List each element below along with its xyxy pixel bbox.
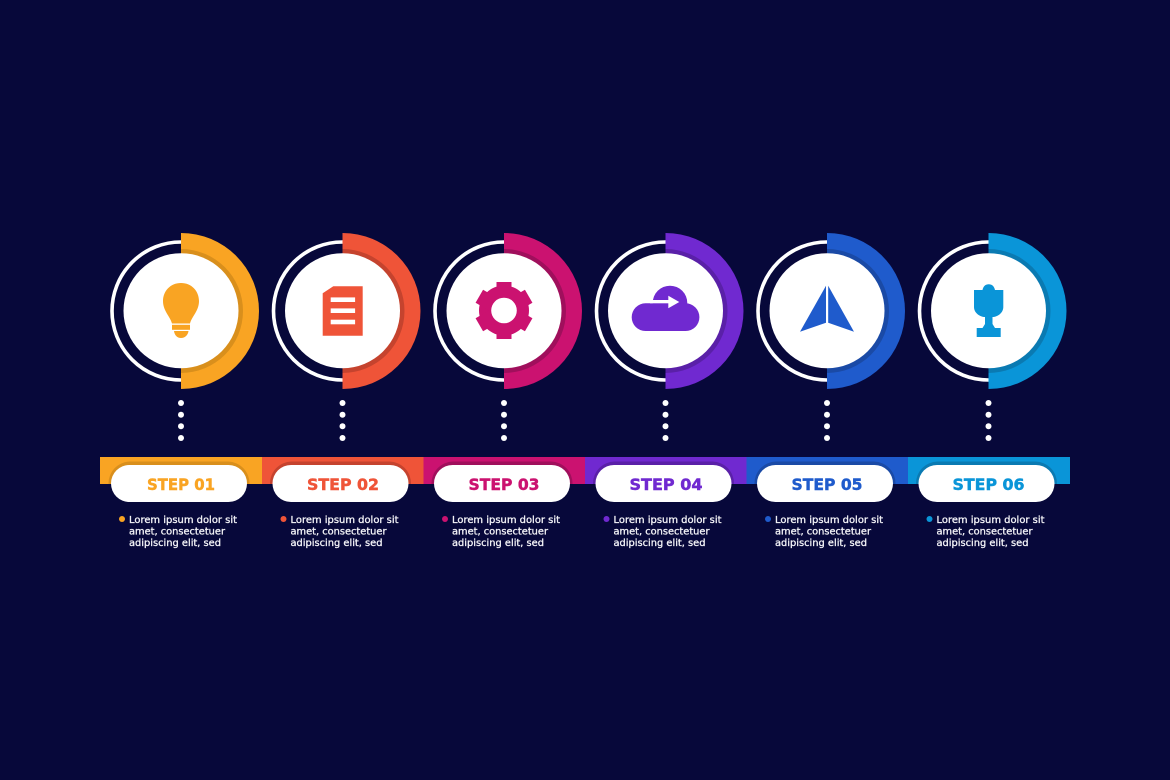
step label 06 (916, 462, 1057, 502)
description 04: Lorem ipsum dolor sit (614, 515, 722, 526)
timeline segment 02 (262, 457, 424, 484)
description 03 (442, 515, 560, 549)
step label 01 (108, 462, 250, 502)
description 01: Lorem ipsum dolor sit (129, 515, 237, 526)
connector dots 04 (662, 400, 668, 441)
icon: cloud with arrow (632, 286, 699, 331)
step label 03 (431, 462, 573, 502)
connector dots 05 (824, 400, 830, 441)
timeline segment 05 (746, 457, 908, 484)
step label 05: STEP 05 (792, 475, 862, 494)
description 05: adipiscing elit, sed (775, 538, 867, 549)
panel: step 05 (746, 233, 908, 549)
connector dots 06 (986, 400, 992, 441)
half ring accent 03 (435, 233, 582, 389)
description 04 (604, 515, 722, 549)
connector dots 03 (501, 400, 507, 441)
description 03: adipiscing elit, sed (452, 538, 544, 549)
timeline segment 01 (100, 457, 262, 484)
step label 03: STEP 03 (468, 475, 540, 494)
description 01: adipiscing elit, sed (129, 538, 221, 549)
step label 02 (270, 462, 411, 502)
description 06: adipiscing elit, sed (936, 538, 1028, 549)
description 06 (926, 515, 1045, 549)
half ring accent 02 (274, 233, 420, 389)
half ring accent 05 (758, 233, 905, 389)
panel: step 03 (424, 233, 585, 549)
description 03: Lorem ipsum dolor sit (452, 515, 560, 526)
description 05 (765, 515, 883, 549)
step label 04 (593, 462, 734, 502)
description 01 (119, 515, 237, 549)
description 02 (280, 515, 399, 549)
timeline segment 06 (908, 457, 1070, 484)
panel: step 01 (100, 233, 262, 549)
half ring accent 01 (112, 233, 259, 389)
connector dots 01 (178, 400, 184, 441)
icon: document (323, 286, 363, 336)
description 06: Lorem ipsum dolor sit (936, 515, 1045, 526)
step label 01: STEP 01 (147, 475, 215, 494)
step label 06: STEP 06 (952, 475, 1024, 494)
timeline segment 04 (585, 457, 746, 484)
icon: navigation arrow (800, 286, 854, 332)
step label 04: STEP 04 (630, 475, 702, 494)
timeline segment 03 (424, 457, 585, 484)
step label 05 (754, 462, 896, 502)
half ring accent 06 (920, 233, 1066, 389)
half ring accent 04 (596, 233, 744, 389)
icon: light bulb (163, 283, 199, 338)
connector dots 02 (340, 400, 346, 441)
description 05: Lorem ipsum dolor sit (775, 515, 883, 526)
panel: step 04 (585, 233, 746, 549)
icon: gear (476, 282, 532, 339)
description 01: amet, consectetuer (129, 526, 226, 538)
icon: trophy (974, 284, 1003, 337)
description 04: adipiscing elit, sed (614, 538, 706, 549)
panel: step 02 (262, 233, 424, 549)
description 02: amet, consectetuer (290, 526, 387, 538)
step label 02: STEP 02 (307, 475, 379, 494)
description 02: Lorem ipsum dolor sit (290, 515, 399, 526)
description 02: adipiscing elit, sed (290, 538, 382, 549)
panel: step 06 (908, 233, 1070, 549)
description 03: amet, consectetuer (452, 526, 549, 538)
description 05: amet, consectetuer (775, 526, 872, 538)
description 06: amet, consectetuer (936, 526, 1033, 538)
description 04: amet, consectetuer (614, 526, 710, 538)
